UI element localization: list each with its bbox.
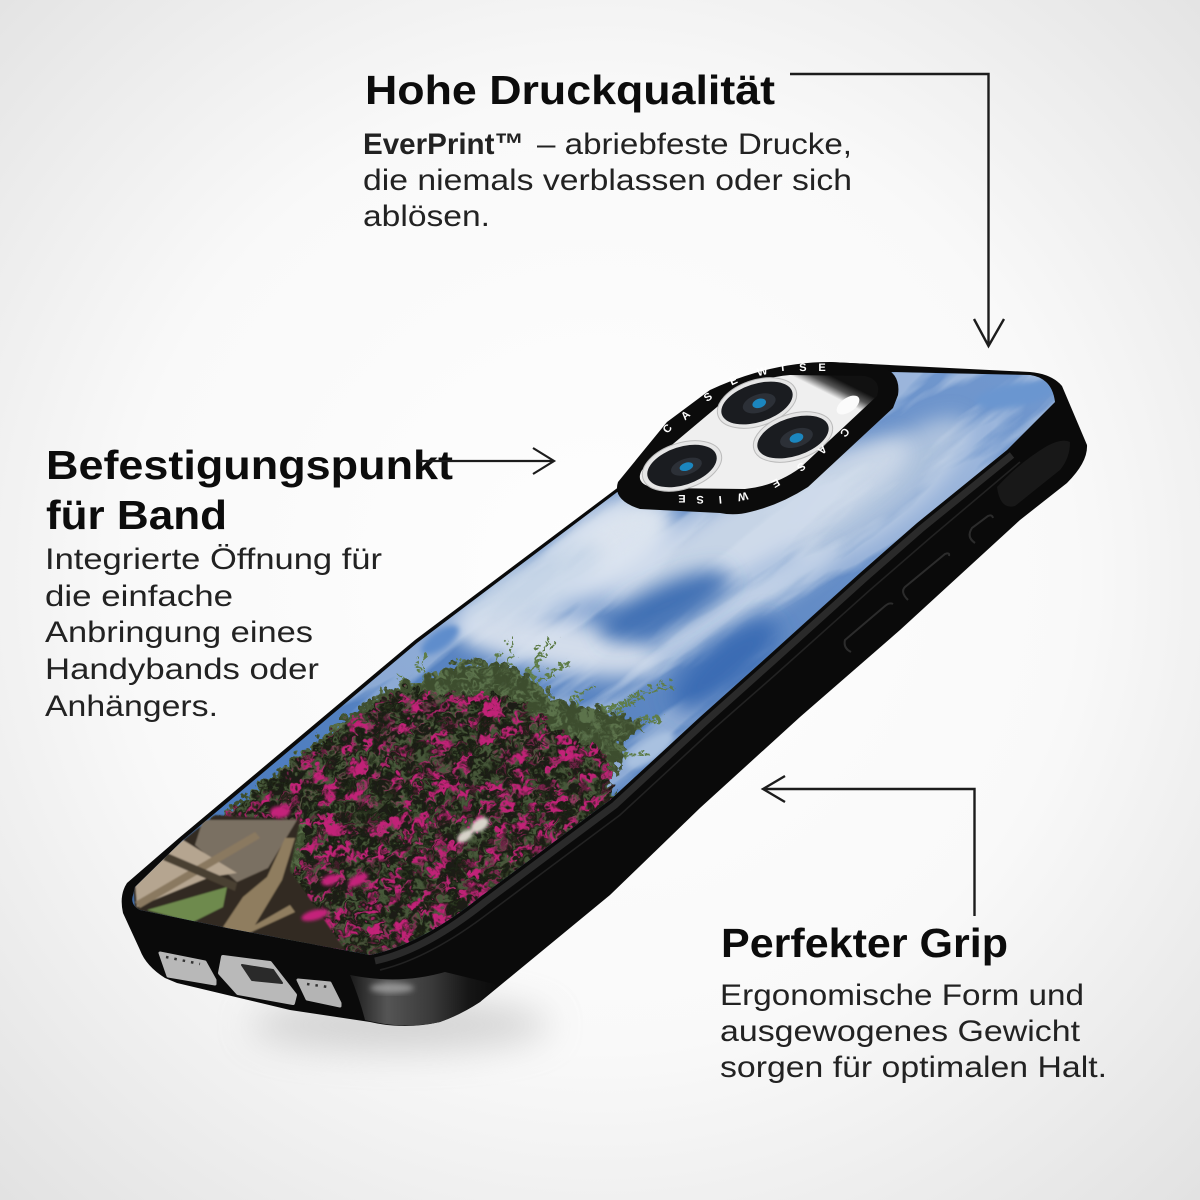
wooden pergola xyxy=(133,815,345,950)
camera island xyxy=(640,375,878,489)
phone case xyxy=(122,362,1088,1026)
side buttons xyxy=(845,515,993,652)
logo lettering: S xyxy=(794,459,807,473)
callout: Befestigungspunkt für Band xyxy=(45,442,453,723)
body text: ablösen. xyxy=(363,200,490,233)
camera bump xyxy=(617,362,898,514)
right speaker xyxy=(298,980,340,1006)
logo lettering: S xyxy=(799,362,807,374)
leafy branches xyxy=(395,632,667,753)
logo lettering: C xyxy=(661,422,675,436)
body text: sorgen für optimalen Halt. xyxy=(720,1051,1107,1084)
flowering tree print xyxy=(133,636,676,955)
body text: Ergonomische Form und xyxy=(720,979,1084,1012)
logo lettering: E xyxy=(769,476,782,490)
heading xyxy=(46,442,453,538)
logo lettering: W xyxy=(736,489,749,503)
camera-side bulge xyxy=(997,441,1070,507)
logo lettering: W xyxy=(756,365,769,379)
logo lettering: S xyxy=(696,493,704,505)
body text: ausgewogenes Gewicht xyxy=(720,1015,1081,1048)
logo lettering: A xyxy=(815,442,829,456)
phone shadow xyxy=(250,999,550,1051)
logo lettering xyxy=(661,362,851,505)
logo lettering: C xyxy=(837,425,851,439)
body text: – abriebfeste Drucke, xyxy=(537,128,852,161)
logo lettering: E xyxy=(678,492,686,504)
logo lettering: A xyxy=(679,409,693,423)
body text: Integrierte Öffnung für xyxy=(45,543,382,576)
body text: Handybands oder xyxy=(45,653,319,686)
logo lettering: I xyxy=(781,362,785,374)
body text: die niemals verblassen oder sich xyxy=(363,164,852,197)
logo lettering: E xyxy=(728,374,740,388)
body text: EverPrint™ xyxy=(363,128,524,161)
low flowers xyxy=(270,806,370,923)
heading: Perfekter Grip xyxy=(721,920,1008,966)
charging port xyxy=(220,957,295,1003)
arrow: print quality xyxy=(790,74,1004,346)
logo lettering: I xyxy=(718,493,722,505)
lens 2 xyxy=(747,402,839,472)
body text xyxy=(363,128,852,233)
white blossoms xyxy=(455,814,492,845)
left speaker xyxy=(160,953,215,984)
logo lettering: S xyxy=(702,391,715,405)
callout: Perfekter Grip xyxy=(720,920,1107,1084)
body text: Anbringung eines xyxy=(45,616,313,649)
body text xyxy=(45,543,382,723)
glossy bottom corner xyxy=(350,972,498,1026)
heading: für Band xyxy=(46,492,227,538)
arrow: strap attachment xyxy=(420,448,554,474)
heading: Befestigungspunkt xyxy=(46,442,453,488)
sky print xyxy=(132,372,1055,955)
case body xyxy=(122,362,1087,1026)
heading: Hohe Druckqualität xyxy=(365,67,775,113)
lens 1 xyxy=(711,368,803,438)
body text: die einfache xyxy=(45,580,233,613)
body text: Anhängers. xyxy=(45,690,218,723)
side edge highlight xyxy=(375,455,1020,970)
lens 3 xyxy=(636,431,728,501)
logo lettering: E xyxy=(818,362,826,374)
arrow: grip xyxy=(763,776,974,916)
body text xyxy=(720,979,1107,1084)
flash xyxy=(833,392,863,418)
callout: Hohe Druckqualität xyxy=(363,67,852,233)
